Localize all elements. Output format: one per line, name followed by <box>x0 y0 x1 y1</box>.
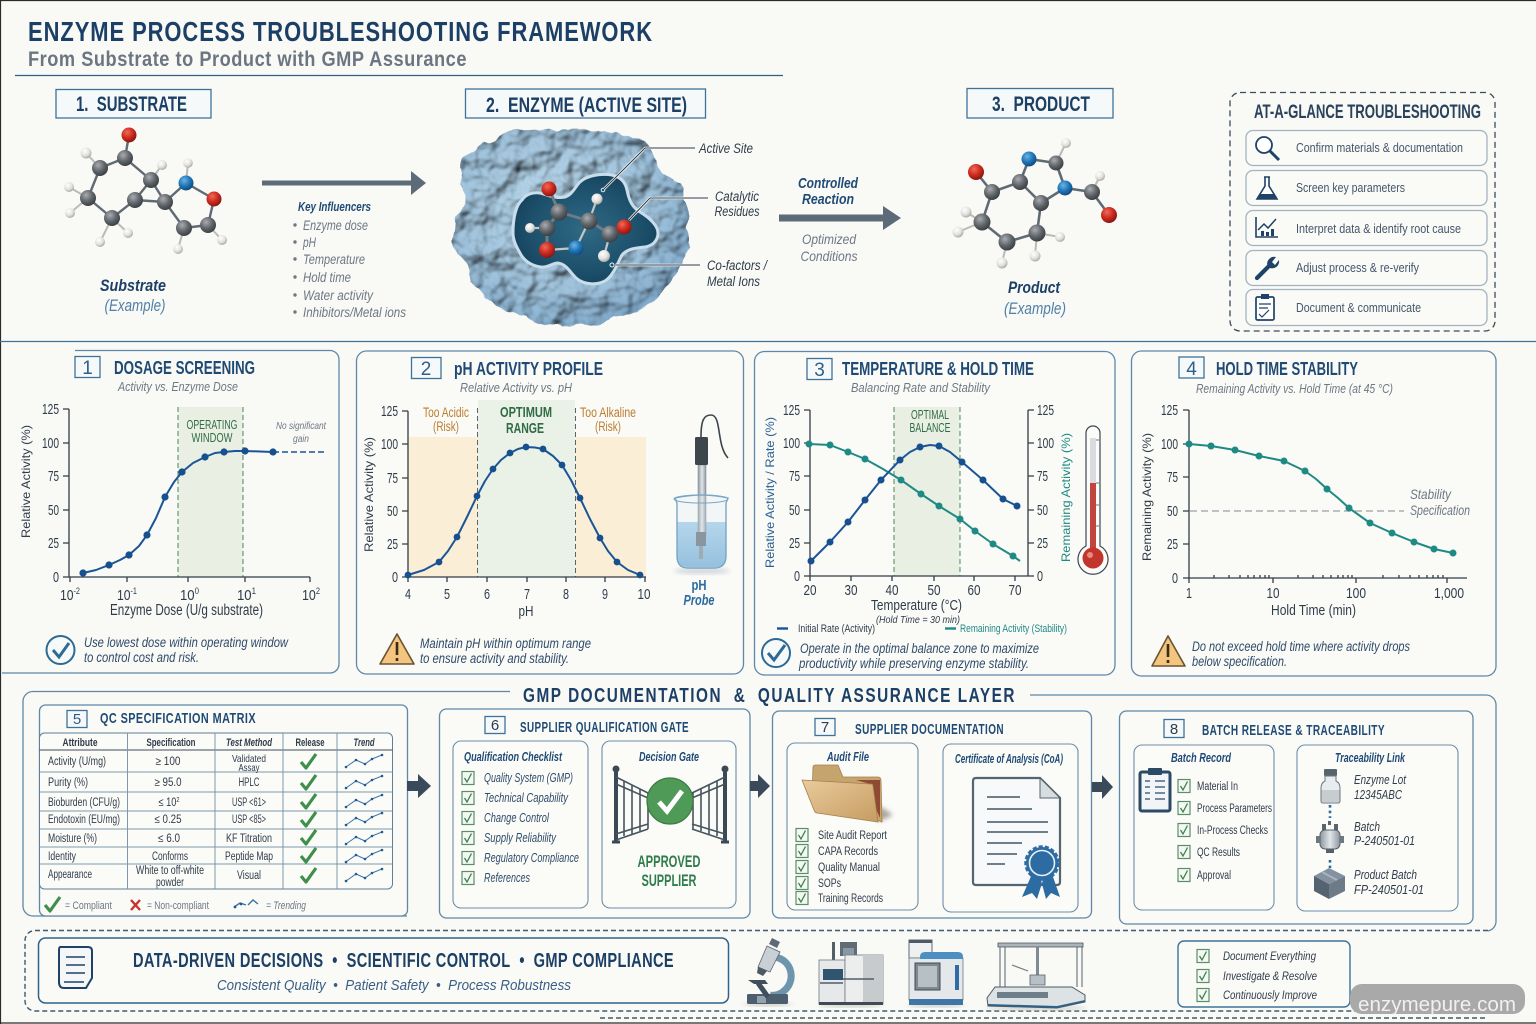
key influencers list: Temperature <box>303 252 365 267</box>
panel 6: supplier qualification gate <box>440 709 750 918</box>
chart: activity vs enzyme dose: 10 <box>60 587 77 604</box>
checklist: continuous improvement <box>1178 941 1350 1007</box>
callout: active site <box>604 141 753 189</box>
arrow: enzyme to product <box>779 206 901 230</box>
qualification checklist <box>453 741 588 908</box>
chart: temperature dual axis: Temperature (°C) <box>871 597 962 614</box>
qualification checklist: References <box>484 871 530 885</box>
qualification checklist: Qualification Checklist <box>464 749 562 764</box>
key influencers list: Key Influencers <box>298 200 371 214</box>
table: specifications: KF Titration <box>226 833 272 845</box>
table: specifications: Specification <box>146 737 196 749</box>
chart: temperature dual axis: 75 <box>789 468 800 485</box>
heading: pH ACTIVITY PROFILE <box>454 358 603 379</box>
chart: activity vs enzyme dose: 1 <box>252 586 256 596</box>
heading: 2 <box>421 359 431 380</box>
heading: 3. product <box>967 88 1113 118</box>
heading: 3. product: 3. PRODUCT <box>992 93 1090 116</box>
chart: activity vs pH: 9 <box>602 586 608 603</box>
chart: activity vs pH: 5 <box>444 586 450 603</box>
table legend: = Trending <box>266 900 307 912</box>
checklist: continuous improvement: Continuously Improve <box>1223 988 1317 1002</box>
optimized conditions label: Conditions <box>800 248 858 264</box>
panel: at-a-glance troubleshooting <box>1230 92 1495 331</box>
batch record: Batch Record <box>1171 750 1232 765</box>
chart: activity vs enzyme dose: Enzyme Dose (U/g substrate) <box>110 602 263 619</box>
heading <box>807 358 1034 381</box>
step: screen key parameters <box>1246 170 1487 206</box>
table: specifications: USP <61> <box>232 797 266 809</box>
banner: data-driven decisions <box>38 938 728 1003</box>
chart: temperature dual axis: 100 <box>1037 435 1054 452</box>
arrow: 5 to 6 <box>407 774 431 798</box>
chart: temperature dual axis: 20 <box>804 582 816 599</box>
panel 3: temperature and hold time: Balancing Rate and Stability <box>851 380 991 395</box>
chart: temperature dual axis: BALANCE <box>910 421 950 435</box>
chart: remaining activity vs hold time: Remaining Activity (%) <box>1140 433 1154 561</box>
product caption <box>1004 278 1066 318</box>
heading <box>75 356 255 379</box>
icon: pH probe in beaker: pH <box>692 577 706 594</box>
watermark <box>1350 984 1525 1016</box>
table: specifications: Release <box>296 737 324 749</box>
panel 5: QC specification matrix <box>40 705 408 916</box>
qualification checklist: Technical Capability <box>484 791 569 805</box>
qualification checklist: Supply Reliability <box>484 831 557 845</box>
tip: warning icon and note: to ensure activity and stability. <box>420 651 569 666</box>
step: interpret data: Interpret data & identify root cause <box>1296 221 1461 236</box>
table: specifications: ≥ 100 <box>156 756 180 768</box>
traceability link: Enzyme Lot <box>1354 773 1406 787</box>
tip: warning icon and note <box>380 634 591 666</box>
table: specifications: ≤ 10 <box>158 797 181 809</box>
batch record: Approval <box>1197 870 1231 882</box>
key influencers list <box>293 200 406 320</box>
chart: activity vs pH: 4 <box>405 586 411 603</box>
table: specifications: Attribute <box>62 737 98 749</box>
heading <box>67 710 256 728</box>
audit file: Quality Manual <box>818 862 880 874</box>
arrow: 7 to 8 <box>1092 775 1113 799</box>
batch record: In-Process Checks <box>1197 825 1268 837</box>
chart: activity vs enzyme dose: 75 <box>48 468 59 485</box>
heading: SUPPLIER QUALIFICATION GATE <box>520 720 689 736</box>
callout: co-factors: Metal Ions <box>707 274 760 289</box>
chart: remaining activity vs hold time: Stability <box>1410 486 1452 502</box>
chart: activity vs enzyme dose: 10 <box>180 587 197 604</box>
table: specifications <box>40 733 392 889</box>
chart: activity vs pH: 25 <box>387 536 398 553</box>
icon: clipboard <box>1140 768 1170 811</box>
audit file: Audit File <box>826 749 869 764</box>
heading: 1 <box>82 358 93 379</box>
heading <box>485 716 689 736</box>
chart: activity vs enzyme dose: 2 <box>316 586 320 596</box>
chart: activity vs pH: (Risk) <box>595 419 621 434</box>
table: specifications: Conforms <box>152 851 188 863</box>
heading <box>815 718 1004 738</box>
step: confirm materials: Confirm materials & documentation <box>1296 140 1463 155</box>
audit file: SOPs <box>818 878 841 890</box>
qualification checklist: Regulatory Compliance <box>484 851 579 865</box>
chart: temperature dual axis: 50 <box>928 582 940 599</box>
tip: warning icon and note: Maintain pH within optimum range <box>420 636 591 651</box>
chart: temperature dual axis: 100 <box>783 435 800 452</box>
chart: activity vs enzyme dose: No significant <box>276 420 327 432</box>
chart: temperature dual axis: 60 <box>968 582 980 599</box>
heading: 2. enzyme <box>466 89 706 118</box>
substrate caption: (Example) <box>104 296 166 315</box>
tip: check icon and note <box>762 639 1039 671</box>
panel 3: temperature and hold time <box>754 352 1115 675</box>
icon: bioreactor cabinet <box>908 940 964 1007</box>
audit file: Training Records <box>818 893 883 905</box>
checklist: continuous improvement: Document Everything <box>1223 949 1316 963</box>
traceability link: 12345ABC <box>1354 788 1403 802</box>
table: specifications: ≤ 6.0 <box>158 833 180 845</box>
chart: temperature dual axis: 40 <box>886 582 898 599</box>
chart: activity vs enzyme dose: 50 <box>48 502 59 519</box>
table: specifications: Validated <box>232 753 266 765</box>
enzyme illustration with active site <box>452 129 689 328</box>
icon: analyzer instrument <box>819 942 883 1007</box>
qualification checklist: Quality System (GMP) <box>484 771 573 785</box>
table: specifications: Identity <box>48 851 76 863</box>
optimized conditions label <box>800 231 858 264</box>
heading: SUPPLIER DOCUMENTATION <box>855 722 1004 738</box>
heading: HOLD TIME STABILITY <box>1216 358 1358 379</box>
audit file: Site Audit Report <box>818 830 888 842</box>
chart: activity vs enzyme dose: Relative Activity (%) <box>19 425 33 538</box>
icon: document with ribbon seal <box>973 778 1060 899</box>
table legend: = Compliant <box>65 900 112 912</box>
molecule: product <box>952 138 1117 268</box>
chart: activity vs enzyme dose: 0 <box>53 569 59 586</box>
chart: temperature dual axis: Relative Activity / Rate (%) <box>763 417 777 568</box>
heading: BATCH RELEASE & TRACEABILITY <box>1202 723 1385 739</box>
table: specifications: Assay <box>238 762 260 774</box>
icon: analytical balance <box>986 943 1086 1010</box>
icon: reactor <box>1316 821 1344 853</box>
decision gate: APPROVED <box>638 852 700 871</box>
heading: 1. substrate <box>56 90 211 118</box>
tip: warning icon and note: Do not exceed hold time where activity drops <box>1192 639 1410 654</box>
table: specifications: powder <box>156 877 184 889</box>
step: interpret data <box>1246 210 1487 246</box>
chart: temperature dual axis: 125 <box>1037 402 1054 419</box>
banner: data-driven decisions: Consistent Quality • Patient Safety • Process Robustness <box>217 977 571 994</box>
heading: TEMPERATURE & HOLD TIME <box>842 358 1034 379</box>
chart: remaining activity vs hold time: 100 <box>1346 585 1366 602</box>
chart legend: Remaining Activity (Stability) <box>960 623 1067 635</box>
icon: microscope <box>744 938 792 1006</box>
chart: activity vs pH: Too Acidic <box>423 405 469 420</box>
chart: temperature dual axis: 25 <box>1037 535 1048 552</box>
chart: temperature dual axis: 50 <box>789 502 800 519</box>
callout: co-factors <box>615 258 768 289</box>
chart: remaining activity vs hold time: 1 <box>1186 585 1192 602</box>
chart: activity vs pH: 125 <box>381 403 398 420</box>
chart: temperature dual axis <box>763 402 1073 626</box>
heading: 1. substrate: 1. SUBSTRATE <box>76 93 187 116</box>
icon: document scroll <box>59 947 92 988</box>
tip: check icon and note: Operate in the optimal balance zone to maximize <box>800 641 1039 656</box>
step: screen key parameters: Screen key parameters <box>1296 180 1405 195</box>
batch record: QC Results <box>1197 847 1240 859</box>
chart: temperature dual axis: Remaining Activity (%) <box>1059 433 1073 562</box>
step: document and communicate: Document & communicate <box>1296 300 1421 315</box>
chart: temperature dual axis: OPTIMAL <box>911 408 949 422</box>
heading: 8 <box>1170 721 1178 738</box>
subtitle: From Substrate to Product with GMP Assurance <box>28 48 467 71</box>
chart: activity vs pH: 75 <box>387 470 398 487</box>
step: confirm materials <box>1246 130 1487 166</box>
panel 8: batch release and traceability <box>1120 711 1473 924</box>
icon: product box <box>1314 868 1345 899</box>
heading: 3 <box>814 360 825 381</box>
chart: activity vs pH: RANGE <box>506 420 544 437</box>
traceability link: Traceability Link <box>1335 750 1406 765</box>
chart legend: Initial Rate (Activity) <box>798 623 875 635</box>
step: document and communicate <box>1246 290 1487 326</box>
chart: temperature dual axis: 70 <box>1008 582 1022 599</box>
key influencers list: Enzyme dose <box>303 218 368 233</box>
chart: activity vs pH: 6 <box>484 586 490 603</box>
chart: remaining activity vs hold time: 0 <box>1172 570 1178 587</box>
chart: remaining activity vs hold time: 100 <box>1161 436 1178 453</box>
batch record: Process Parameters <box>1197 803 1272 815</box>
table: specifications: Purity (%) <box>48 777 88 789</box>
chart: remaining activity vs hold time: 1,000 <box>1434 585 1464 602</box>
table legend: = Non-compliant <box>147 900 209 912</box>
chart: temperature dual axis: 30 <box>844 582 858 599</box>
chart: activity vs pH: Too Alkaline <box>580 405 636 420</box>
chart: activity vs enzyme dose: gain <box>293 433 309 445</box>
heading <box>1179 357 1358 380</box>
traceability link: FP-240501-01 <box>1354 883 1424 897</box>
chart: activity vs enzyme dose: WINDOW <box>192 430 233 445</box>
tip: warning icon and note: below specification. <box>1192 654 1287 669</box>
table: specifications: 2 <box>176 797 180 804</box>
chart: activity vs pH: Relative Activity (%) <box>362 437 376 552</box>
icon: folder <box>802 765 893 822</box>
chart: activity vs pH: 100 <box>381 436 398 453</box>
chart: activity vs enzyme dose: 10 <box>302 587 319 604</box>
product caption: (Example) <box>1004 299 1066 318</box>
table: specifications: Trend <box>354 737 375 749</box>
heading: 5 <box>73 711 81 728</box>
molecule: substrate <box>64 128 227 254</box>
table: specifications: ≤ 0.25 <box>154 814 182 826</box>
table: specifications: Moisture (%) <box>48 833 97 845</box>
table: specifications: Test Method <box>226 737 272 749</box>
chart: activity vs pH: 10 <box>638 586 650 603</box>
panel 2: pH activity profile <box>356 351 744 674</box>
footer frame <box>25 930 1490 1018</box>
tip: check icon and note <box>46 635 289 665</box>
traceability link: Product Batch <box>1354 868 1417 882</box>
qualification checklist: Change Control <box>484 811 550 825</box>
tip: check icon and note: Use lowest dose within operating window <box>84 635 289 650</box>
tip: check icon and note: to control cost and risk. <box>84 650 199 665</box>
arrow: substrate to enzyme <box>262 171 426 195</box>
chart: activity vs enzyme dose: -1 <box>131 586 137 596</box>
chart: activity vs pH: 7 <box>524 586 530 603</box>
chart: remaining activity vs hold time: 10 <box>1266 585 1280 602</box>
callout: catalytic residues: Catalytic <box>715 189 759 204</box>
heading <box>412 358 603 380</box>
table: specifications: Peptide Map <box>225 851 273 863</box>
optimized conditions label: Optimized <box>802 231 857 247</box>
table: specifications: USP <85> <box>232 814 266 826</box>
table legend <box>45 897 307 912</box>
table: specifications: HPLC <box>238 777 260 789</box>
chart legend <box>777 623 1067 635</box>
substrate caption: Substrate <box>100 276 166 295</box>
substrate caption <box>100 276 166 315</box>
enzyme bound molecule <box>525 182 632 262</box>
controlled reaction label: Controlled <box>798 175 859 192</box>
heading: 2. enzyme: 2. ENZYME (ACTIVE SITE) <box>486 94 687 117</box>
chart: activity vs enzyme dose: 10 <box>237 587 254 604</box>
chart: activity vs enzyme dose: -2 <box>74 586 80 596</box>
heading: DOSAGE SCREENING <box>114 357 255 378</box>
key influencers list: pH <box>302 235 316 250</box>
chart: remaining activity vs hold time <box>1140 402 1470 619</box>
callout: co-factors: Co-factors / <box>707 258 768 273</box>
chart: temperature dual axis: 50 <box>1037 502 1048 519</box>
traceability link: Batch <box>1354 820 1380 834</box>
callout: active site: Active Site <box>698 141 753 156</box>
banner: data-driven decisions: DATA-DRIVEN DECISIONS • SCIENTIFIC CONTROL • GMP COMPLIANCE <box>133 950 674 972</box>
icon: thermometer <box>1078 426 1108 574</box>
audit file <box>787 743 918 910</box>
table: specifications: Activity (U/mg) <box>48 756 106 768</box>
watermark: enzymepure.com <box>1358 994 1516 1016</box>
heading: 6 <box>491 717 499 734</box>
chart: activity vs enzyme dose <box>19 401 327 619</box>
table: specifications: Endotoxin (EU/mg) <box>48 814 120 826</box>
icon: vial <box>1321 769 1340 803</box>
batch record: Material In <box>1197 781 1238 793</box>
tip: check icon and note: productivity while preserving enzyme stability. <box>798 656 1029 671</box>
chart: activity vs pH: (Risk) <box>433 419 459 434</box>
table: specifications: ≥ 95.0 <box>154 777 182 789</box>
decision gate: SUPPLIER <box>642 871 696 890</box>
certificate of analysis: Certificate of Analysis (CoA) <box>955 752 1063 766</box>
heading: 7 <box>821 719 829 736</box>
key influencers list: Water activity <box>303 288 374 303</box>
heading <box>1164 720 1385 739</box>
key influencers list: Hold time <box>303 270 351 285</box>
checklist: continuous improvement: Investigate & Resolve <box>1223 969 1317 983</box>
chart: remaining activity vs hold time: Specification <box>1410 502 1470 518</box>
chart: remaining activity vs hold time: 125 <box>1161 402 1178 419</box>
chart: activity vs enzyme dose: 25 <box>48 535 59 552</box>
panel 1: dosage screening <box>2 350 339 673</box>
panel 1: dosage screening: Activity vs. Enzyme Dose <box>117 379 238 394</box>
heading: QC SPECIFICATION MATRIX <box>100 710 256 727</box>
certificate of analysis <box>943 744 1078 912</box>
chart: remaining activity vs hold time: 50 <box>1167 503 1178 520</box>
section heading: GMP documentation and quality assurance layer: GMP DOCUMENTATION & QUALITY ASSURANCE LAYER <box>523 685 1016 707</box>
panel 2: pH activity profile: Relative Activity vs. pH <box>460 380 573 395</box>
panel 4: hold time stability <box>1132 351 1496 676</box>
step: adjust process <box>1246 250 1487 286</box>
batch record <box>1134 745 1274 910</box>
audit file: CAPA Records <box>818 846 878 858</box>
callout: catalytic residues: Residues <box>714 204 760 219</box>
chart: activity vs pH: 0 <box>392 569 398 586</box>
table: specifications: White to off-white <box>136 865 204 877</box>
chart: temperature dual axis: 125 <box>783 402 800 419</box>
chart: activity vs enzyme dose: 125 <box>42 401 59 418</box>
icon: pH probe in beaker <box>674 415 730 609</box>
product caption: Product <box>1008 278 1061 297</box>
chart: remaining activity vs hold time: Hold Time (min) <box>1271 602 1356 619</box>
key influencers list: Inhibitors/Metal ions <box>303 305 406 320</box>
chart: activity vs pH: OPTIMUM <box>500 404 552 421</box>
callout: catalytic residues <box>629 189 760 220</box>
traceability link: P-240501-01 <box>1354 834 1415 848</box>
table: specifications: Visual <box>237 870 261 882</box>
chart: activity vs enzyme dose: OPERATING <box>186 417 238 432</box>
decision gate <box>602 741 736 908</box>
chart: activity vs enzyme dose: 0 <box>195 586 199 596</box>
chart: remaining activity vs hold time: 75 <box>1167 469 1178 486</box>
chart: temperature dual axis: (Hold Time = 30 min) <box>876 614 960 626</box>
section frame: GMP documentation layer <box>23 692 1496 931</box>
chart: temperature dual axis: 25 <box>789 535 800 552</box>
chart: activity vs pH: 50 <box>387 503 398 520</box>
chart: remaining activity vs hold time: 25 <box>1167 536 1178 553</box>
chart: activity vs pH <box>362 400 650 620</box>
panel 4: hold time stability: Remaining Activity vs. Hold Time (at 45 °C) <box>1196 381 1393 396</box>
decision gate: Decision Gate <box>639 749 699 764</box>
chart: activity vs pH: 8 <box>563 586 569 603</box>
chart: temperature dual axis: 75 <box>1037 468 1048 485</box>
heading: 4 <box>1186 359 1197 380</box>
chart: temperature dual axis: 0 <box>1037 568 1043 585</box>
controlled reaction label: Reaction <box>802 191 854 208</box>
chart: activity vs enzyme dose: 10 <box>117 587 134 604</box>
icon: gate with approval check <box>612 766 729 842</box>
step: adjust process: Adjust process & re-verify <box>1296 260 1419 275</box>
tip: warning icon and note <box>1152 636 1410 669</box>
controlled reaction label <box>798 175 859 208</box>
arrow: 6 to 7 <box>750 774 770 798</box>
table: specifications: Bioburden (CFU/g) <box>48 797 120 809</box>
chart: activity vs enzyme dose: 100 <box>42 435 59 452</box>
chart: temperature dual axis: 0 <box>794 568 800 585</box>
chart: activity vs pH: pH <box>518 603 534 620</box>
panel 7: supplier documentation <box>772 711 1092 918</box>
table: specifications: Appearance <box>48 869 92 881</box>
icon: pH probe in beaker: Probe <box>684 592 714 609</box>
traceability link <box>1297 745 1458 911</box>
title: ENZYME PROCESS TROUBLESHOOTING FRAMEWORK <box>28 16 653 47</box>
